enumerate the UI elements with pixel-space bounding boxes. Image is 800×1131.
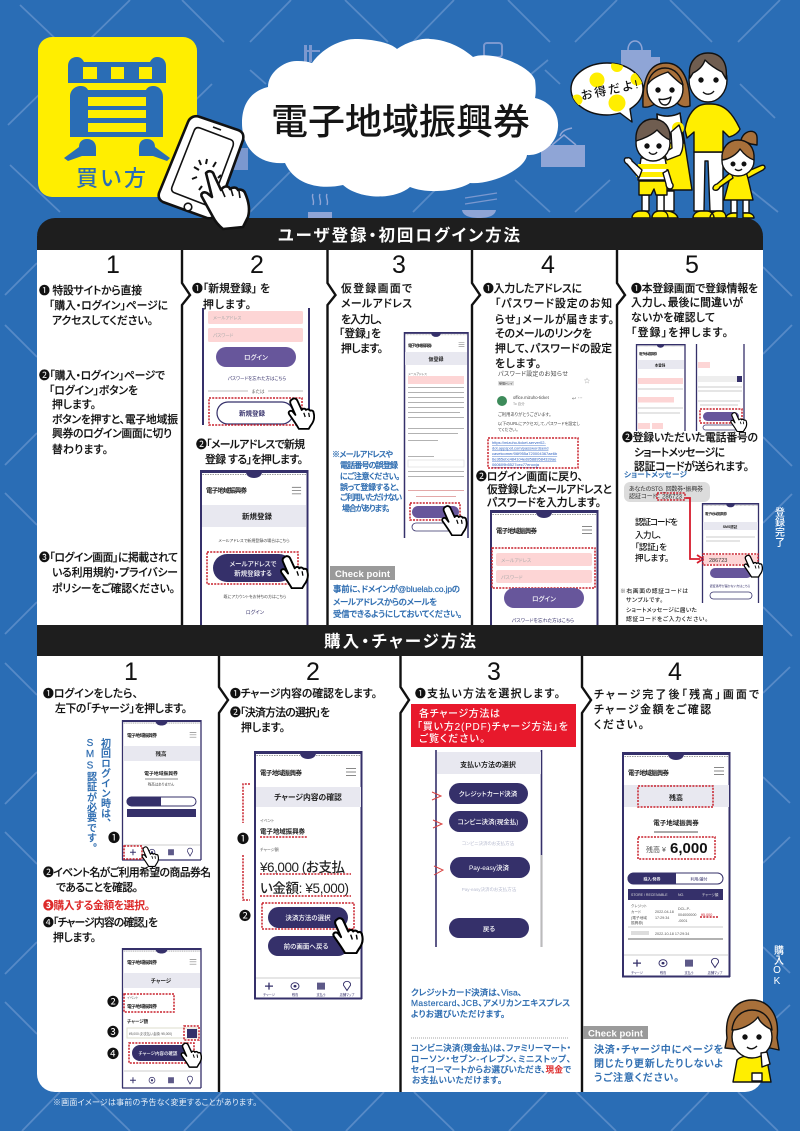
screen: charge confirmation: 電子地域振興券	[260, 768, 302, 777]
screen: charge confirmation: ¥6,000 (お支払	[259, 860, 346, 875]
screen: charge confirmation: イベント	[260, 818, 275, 823]
step 5: registration: ❷登録いただいた電話番号の	[622, 430, 758, 444]
purchase step 4: チャージ金額をご確認	[594, 702, 711, 716]
logo: 買い方 yellow badge	[38, 37, 197, 197]
screen: balance after charge: NO.	[678, 893, 684, 897]
screen: balance after charge: (電子地域	[631, 915, 647, 920]
heading bar: ユーザ登録・初回ログイン方法: ユーザ登録・初回ログイン方法	[278, 225, 520, 245]
screen: balance after charge: 利用/譲付	[690, 876, 708, 882]
email screenshot: office.mizuho-ticket	[513, 395, 550, 400]
purchase step 2: ❶チャージ内容の確認をします。	[230, 686, 377, 700]
email screenshot	[488, 370, 590, 468]
purchase step 1	[43, 658, 211, 1088]
step 4: registration: 「パスワード設定のお知	[495, 296, 612, 310]
callout: see PDF guide: 「買い方2(PDF)チャージ方法」を	[417, 720, 568, 733]
purchase step 2: 2	[306, 658, 320, 686]
check point text: うご注意ください。	[594, 1071, 679, 1084]
SMS message bubble	[624, 482, 710, 502]
screen: charge: 電子地域振興券	[127, 1003, 157, 1010]
purchase step 1: であることを確認。	[56, 880, 138, 894]
screen: balance	[122, 720, 201, 866]
screen: charge: チャージ内容の確認	[138, 1050, 178, 1057]
purchase step 1: 押します。	[53, 930, 96, 944]
screen: charge confirmation: 店舗マップ	[340, 992, 355, 997]
purchase step 1: 左下の「チャージ」を押します。	[55, 701, 187, 715]
screen: login with new registration button: ログイン	[244, 352, 269, 362]
screen: balance after charge: 購入/発券	[643, 876, 661, 882]
step 5: registration: ないかを確認して	[631, 310, 715, 324]
screen: balance after charge: チャージ額	[702, 892, 719, 897]
screen: balance after charge: -0001	[678, 919, 687, 923]
note: email and phone typo warning: ご利用いただけない	[340, 492, 402, 502]
heading bar: 購入・チャージ方法	[37, 625, 763, 656]
step 4: registration: らせ」メールが届きます。	[495, 312, 614, 326]
screen: charge: ¥5,000 (お支払い金額: ¥5,000)	[129, 1031, 172, 1036]
step 1: registration: 替わります。	[52, 442, 108, 456]
screen: new registration: ログイン	[246, 609, 264, 616]
step 3: registration	[330, 251, 468, 619]
check point badge	[583, 1026, 648, 1040]
step 3: registration: 3	[392, 251, 406, 279]
step 2: registration: 登録 する」を押します。	[205, 452, 303, 466]
screen: new registration	[200, 470, 308, 625]
step 1: registration: ❶ 特設サイトから直接	[39, 283, 142, 297]
family illustration	[571, 53, 765, 218]
woman illustration	[725, 1000, 779, 1082]
step 4: registration: ❶入力したアドレスに	[483, 282, 582, 295]
purchase step 1: ❹「チャージ内容の確認」を	[43, 915, 158, 929]
callout: see PDF guide	[411, 704, 576, 747]
check point text: 事前に、ドメインが@bluelab.co.jpの	[333, 584, 460, 594]
bracket with markers: ❷	[239, 909, 251, 923]
arrow: code to input field	[686, 498, 703, 563]
email screenshot: https://mizuho-ticket-server02-	[492, 440, 546, 445]
screen: charge confirmation: チャージ額	[260, 846, 279, 852]
step 1: registration: 「購入・ログイン」ページに	[49, 298, 168, 312]
step 1: registration: いる利用規約・プライバシー	[52, 565, 178, 579]
step 3: registration: を入力し、	[341, 313, 383, 326]
email screenshot: dot.appspot.com/passwordsend	[492, 446, 548, 450]
callout: see PDF guide: ご覧ください。	[419, 732, 485, 745]
step 4: registration: 押して、パスワードの設定	[495, 341, 612, 355]
check point text: 受信できるようにしておいてください。	[333, 609, 462, 619]
step 5: registration: 認証コードをご入力ください。	[626, 615, 708, 623]
screen: payment method selection: コンビニ決済(現金払)	[457, 817, 518, 826]
screen: balance after charge	[622, 752, 730, 977]
check point text: 閉じたり更新したりしないよ	[594, 1057, 723, 1070]
screen: login with new registration button: メールアドレス	[213, 316, 242, 322]
purchase step 3: 3	[487, 658, 501, 686]
dividers between steps	[182, 250, 625, 1092]
screen: main registration form: 電子地域振興券	[639, 351, 658, 356]
step 2: registration	[192, 251, 314, 625]
title: 電子地域振興券: 電子地域振興券	[271, 101, 530, 142]
purchase step 2: ❷「決済方法の選択」を	[230, 705, 330, 719]
screen: payment method selection: 支払い方法の選択	[460, 760, 516, 769]
screen: login with new registration button: 新規登録	[239, 408, 266, 418]
purchase step 1: ❶	[108, 831, 120, 845]
step 5: registration: 認証コードが送られます。	[634, 459, 749, 473]
step 5: registration: サンプルです。	[626, 597, 663, 604]
step 3: registration: 押します。	[341, 341, 383, 355]
payment notes: お支払いいただけます。	[412, 1075, 502, 1085]
check point badge: Check point	[335, 569, 391, 580]
step 1: registration: ポリシーをご確認ください。	[52, 581, 175, 595]
step 5: registration: 5	[685, 251, 699, 279]
step 4: registration	[476, 251, 614, 625]
purchase step 1: ❶ログインをしたら、	[43, 686, 138, 700]
screen: balance after charge: 電子地域振興券	[653, 818, 699, 827]
purchase step 1: ❷	[107, 995, 119, 1009]
screen: balance after charge: 支払う	[684, 970, 694, 975]
payment notes: クレジットカード決済は、Visa、	[411, 988, 522, 998]
screen: SMS verification: 電子地域振興券	[705, 511, 728, 516]
screen: login: ログイン	[532, 594, 557, 603]
note: email and phone typo warning: 場合があります。	[342, 503, 390, 513]
screen: balance after charge: ¥5,000	[701, 913, 712, 917]
email screenshot: パスワード設定のお知らせ	[498, 370, 568, 378]
purchase step 2: 押します。	[241, 720, 285, 734]
check point text: 決済・チャージ中にページを	[594, 1043, 723, 1056]
screen: charge confirmation: チャージ内容の確認	[274, 792, 342, 802]
screen: balance after charge: 残高	[660, 970, 666, 975]
screen: provisional registration: メールアドレス	[408, 371, 427, 376]
speech bubble: お得だよ!	[571, 60, 644, 122]
payment notes: ローソン・セブン-イレブン、ミニストップ、	[411, 1054, 571, 1064]
heading bar: 購入・チャージ方法: 購入・チャージ方法	[324, 631, 476, 651]
screen: balance after charge: 004000000	[678, 913, 696, 917]
logo: 買い方 yellow badge: 買い方	[76, 166, 146, 191]
note: email and phone typo warning: にご注意ください。	[340, 471, 400, 481]
email screenshot: ☆	[584, 377, 590, 385]
purchase step 2	[230, 658, 377, 999]
vertical label: 登録完了: 登録完了	[772, 506, 784, 547]
screen: balance after charge: 17:29:34	[655, 916, 669, 920]
vertical note: SMS authentication	[84, 737, 110, 853]
email screenshot: 以下のURLにアクセスして、パスワードを設定し	[498, 420, 580, 426]
email screenshot: てください。	[498, 426, 518, 432]
purchase step 3: ❶支払い方法を選択します。	[415, 686, 560, 700]
check point badge	[330, 566, 395, 580]
boy	[624, 119, 673, 218]
payment notes: セイコーマートからお選びいただき、現金で	[411, 1064, 571, 1074]
screen: payment method selection: クレジットカード決済	[458, 789, 518, 798]
screen: balance after charge: カード	[631, 909, 642, 914]
screen: charge confirmation: 支払う	[316, 992, 326, 997]
check point text	[594, 1043, 723, 1084]
screen: SMS verification	[702, 503, 762, 603]
screen: login with new registration button: パスワード	[213, 333, 233, 338]
screen: balance after charge: 2022-10-18 17:29:34	[655, 932, 689, 936]
screen: provisional registration	[404, 332, 468, 538]
screen: charge: 電子地域振興券	[127, 959, 157, 966]
email screenshot: To 自分	[513, 401, 525, 406]
step 2: registration: ❷「メールアドレスで新規	[196, 437, 305, 451]
screen: new registration: 新規登録する	[234, 568, 272, 578]
screen: balance after charge: 電子地域振興券	[628, 768, 670, 777]
purchase step 1: ❸	[107, 1025, 119, 1039]
note: email and phone typo warning	[332, 450, 402, 513]
screen: login with new registration button	[203, 308, 314, 429]
screen: balance after charge: 2022-04-18	[655, 910, 674, 914]
step 5: registration: ショートメッセージ	[624, 470, 688, 479]
screen: payment method selection: Pay-easy決済のお支払方法	[462, 886, 517, 893]
vertical note: SMS authentication: 初回ログイン時は、	[98, 737, 110, 828]
screen: new registration: 新規登録	[242, 511, 272, 521]
step 5: registration: ショートメッセージに	[634, 446, 725, 459]
step 1: registration: 1	[106, 251, 120, 279]
heading bar: ユーザ登録・初回ログイン方法	[37, 218, 763, 250]
step 1: registration: ❸「ログイン画面」に掲載されて	[39, 550, 178, 564]
screen: login with new registration button: パスワードを忘れた方はこちら	[228, 375, 286, 382]
purchase step 4: 4	[668, 658, 682, 686]
screen: provisional registration: 仮登録	[428, 356, 444, 363]
step 3: registration: メールアドレス	[341, 297, 412, 310]
step 5: registration: 入力し、	[635, 530, 662, 540]
SMS message bubble: あなたのSTG_回数券・振興券	[629, 485, 703, 493]
step 2: registration: 押します。	[203, 297, 251, 311]
bracket with markers	[237, 784, 251, 923]
speech bubble: お得だよ!: お得だよ!	[580, 76, 639, 103]
screen: SMS verification: 認証番号が届かない方はこちら	[710, 583, 750, 588]
screen: balance after charge: 6,000	[670, 840, 708, 857]
step 5: registration: ※右画面の認証コードは	[620, 587, 688, 595]
step 1: registration: ❷「購入・ログイン」ページで	[39, 368, 166, 382]
step 5: registration: 入力し、最後に間違いが	[631, 295, 743, 309]
screen: payment method selection: Pay-easy決済	[469, 863, 510, 872]
screen: charge: チャージ	[151, 978, 172, 985]
screen: SMS verification: 286723	[709, 558, 727, 564]
screen: balance after charge: 残高 ¥	[646, 845, 666, 854]
email screenshot: 受信トレイ	[499, 380, 513, 386]
vertical note: SMS authentication: SMS認証が必要です。	[84, 738, 96, 853]
step 1: registration: アクセスしてください。	[52, 314, 153, 327]
step 5: registration	[620, 251, 762, 623]
screen: login: 電子地域振興券	[496, 526, 538, 535]
screen: provisional registration: 電子地域振興券	[408, 342, 433, 349]
check point text	[333, 584, 462, 619]
screen: balance: 残高はありません	[148, 782, 175, 786]
screen: new registration: メールアドレスで	[229, 560, 277, 568]
screen: charge confirmation: 電子地域振興券	[260, 826, 306, 836]
step 5: registration: 「登録」を押します。	[631, 325, 728, 339]
screen: payment method selection: コンビニ決済のお支払方法	[462, 840, 515, 847]
payment notes: Mastercard、JCB、アメリカンエキスプレス	[411, 998, 570, 1008]
screen: charge	[122, 948, 201, 1088]
screen: login	[490, 510, 598, 625]
mother	[643, 63, 692, 218]
footnote: ※画面イメージは事前の予告なく変更することがあります。	[53, 1097, 257, 1107]
note: email and phone typo warning: 電話番号の誤登録	[340, 460, 398, 470]
check point badge: Check point	[588, 1028, 644, 1040]
vertical label: 購入OK: 購入OK	[772, 944, 784, 987]
screen: charge: チャージ額	[127, 1018, 149, 1025]
payment notes: よりお選びいただけます。	[411, 1009, 505, 1019]
screen: charge confirmation: 残高	[292, 992, 298, 997]
purchase step 1: ❸購入する金額を選択。	[43, 898, 150, 912]
screen: charge confirmation: い金額: ¥5,000)	[260, 880, 349, 896]
screen: new registration: メールアドレスで新規登録の場合はこちら	[218, 537, 290, 543]
step 4: registration: パスワードを入力します。	[487, 496, 601, 509]
email screenshot: 060609b5527cec77enoxja	[492, 462, 540, 467]
screen: SMS verification: SMS認証	[723, 524, 738, 529]
note: email and phone typo warning: ※メールアドレスや	[332, 450, 393, 459]
step 5: registration: ❶本登録画面で登録情報を	[631, 281, 758, 295]
screen: confirm and register	[696, 344, 747, 432]
phone with tapping hand icon	[159, 116, 249, 229]
step 2: registration: ❶「新規登録」 を	[192, 281, 270, 295]
cloud behind title	[242, 39, 558, 197]
screen: new registration: 既にアカウントをお持ちの方はこちら	[224, 593, 287, 599]
screen: balance after charge: 店舗マップ	[708, 970, 723, 975]
step 4: registration: をします。	[495, 357, 541, 370]
step 4: registration: ❷ログイン画面に戻り、	[476, 469, 583, 483]
panel: white body upper and lower sections	[37, 235, 763, 1092]
SMS message bubble: 認証コード： 286723	[629, 494, 683, 500]
screen: login: メールアドレス	[501, 558, 532, 564]
screen: charge confirmation: 前の画面へ戻る	[284, 942, 328, 950]
email screenshot: 6e365ebc484104ed85889584339ae	[492, 456, 557, 462]
step 4: registration: そのメールのリンクを	[495, 327, 592, 340]
screen: charge confirmation: 決済方法の選択	[285, 913, 331, 922]
screen: balance after charge: DCL-P-	[678, 907, 691, 911]
payment notes: コンビニ決済(現金払)は、ファミリーマート・	[411, 1043, 571, 1053]
step 1: registration: 押します。	[52, 397, 96, 411]
email screenshot: cavetcomer/06f955a720004367ae6b	[492, 451, 558, 456]
screen: balance after charge: チャージ	[631, 970, 643, 975]
purchase step 4: ください。	[594, 718, 644, 731]
screen: balance after charge: 振興券)	[631, 920, 643, 925]
screen: main registration form	[636, 344, 685, 431]
bracket with markers: ❶	[237, 832, 249, 846]
screen: payment method selection: 戻る	[483, 925, 495, 933]
step 5: registration: 「認証」を	[635, 542, 667, 552]
screen: balance: 電子地域振興券	[144, 770, 178, 777]
screen: charge: イベント	[127, 996, 138, 1000]
screen: main registration form: 本登録	[655, 362, 666, 368]
screen: login with new registration button: または	[251, 389, 265, 395]
step 5: registration: ショートメッセージに届いた	[626, 606, 697, 614]
screen: login: パスワードを忘れた方はこちら	[512, 617, 575, 624]
purchase step 3	[411, 658, 576, 1085]
father	[685, 53, 740, 218]
step 4: registration: 仮登録したメールアドレスと	[487, 482, 612, 496]
screen: balance after charge: 残高	[669, 793, 683, 802]
payment notes	[411, 988, 571, 1085]
step 1: registration: ボタンを押すと、電子地域振	[52, 412, 178, 426]
step 1: registration: 「ログイン」ボタンを	[49, 383, 138, 397]
purchase step 1: ❷イベント名がご利用希望の商品券名	[43, 865, 211, 879]
purchase step 4	[583, 658, 779, 1084]
callout: see PDF guide: 各チャージ方法は	[419, 707, 500, 720]
purchase step 4: チャージ完了後「残高」画面で	[594, 687, 760, 701]
email screenshot: ご利用ありがとうございます。	[498, 411, 551, 418]
girl	[713, 131, 765, 218]
step 3: registration: 仮登録画面で	[341, 281, 413, 295]
screen: balance: 残高	[155, 750, 167, 758]
screen: payment method selection	[432, 750, 542, 947]
step 4: registration: 4	[541, 251, 555, 279]
screen: login: パスワード	[501, 575, 523, 581]
screen: charge confirmation: チャージ	[263, 992, 275, 997]
email screenshot: ↩ ⋯	[572, 396, 583, 402]
step 3: registration: 「登録」を	[339, 326, 381, 340]
step 5: registration: 認証コードを	[635, 517, 678, 527]
screen: balance after charge: STORE / RECEIVABLE	[631, 893, 668, 897]
note: email and phone typo warning: 誤って登録すると、	[340, 482, 400, 492]
step 1: registration: 興券のログイン画面に切り	[52, 426, 172, 440]
faint background icons: shopping, food, goods	[232, 41, 660, 218]
screen: balance after charge: クレジット	[631, 903, 648, 908]
purchase step 1: 1	[124, 658, 138, 686]
purchase step 1: ❹	[107, 1047, 119, 1061]
screen: charge confirmation	[254, 751, 363, 999]
step 1: registration	[39, 251, 178, 595]
step 2: registration: 2	[250, 251, 264, 279]
screen: new registration: 電子地域振興券	[206, 486, 248, 494]
screen: balance: 電子地域振興券	[127, 732, 157, 739]
check point text: メールアドレスからのメールを	[333, 597, 437, 607]
step 5: registration: 押します。	[635, 553, 669, 563]
